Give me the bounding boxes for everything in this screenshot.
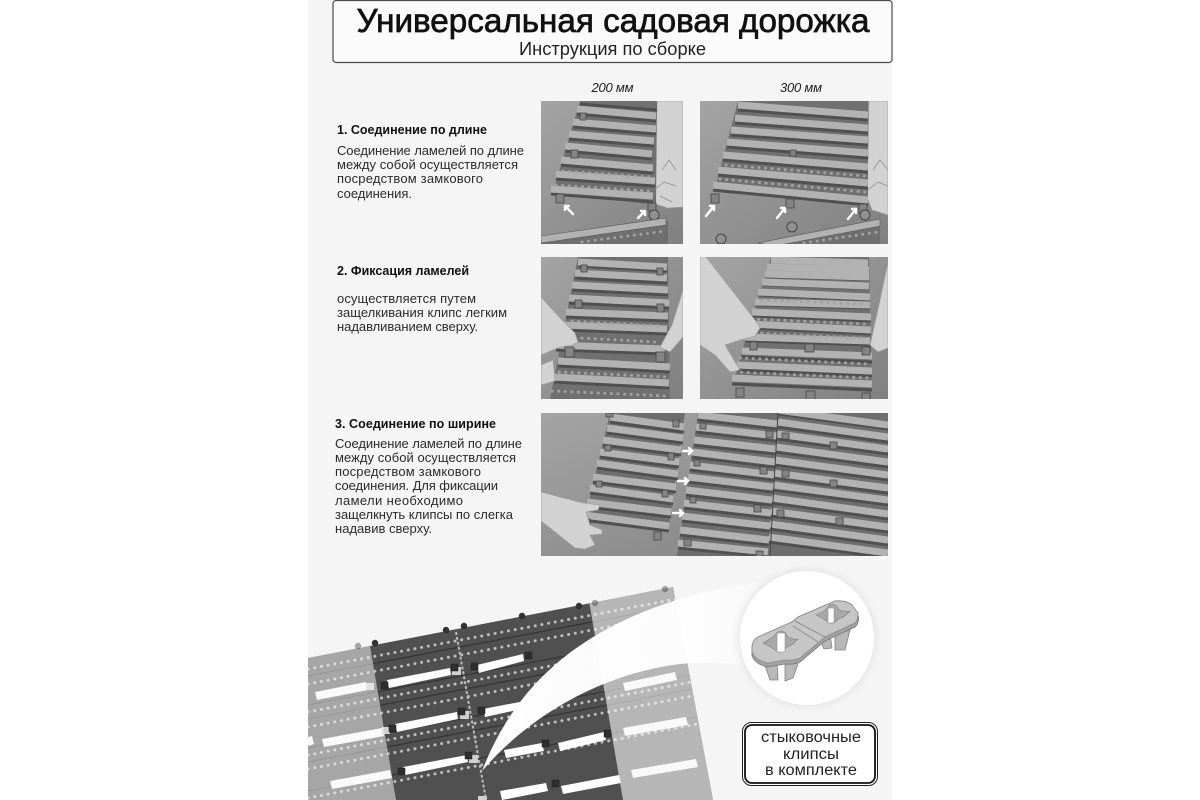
step 2 text: надавливанием сверху. (337, 319, 478, 334)
step 3 text: защелкнуть клипсы по слегка (335, 507, 514, 522)
step 3 text: 3. Соединение по ширине (335, 417, 496, 431)
column label: 300 mm: 300 мм (780, 80, 822, 95)
step 2 text: 2. Фиксация ламелей (337, 264, 469, 278)
background panel (308, 0, 892, 800)
callout: clips included: в комплекте (765, 762, 857, 779)
icon: docking clip (752, 601, 859, 681)
step 3 text: Соединение ламелей по длине (335, 436, 522, 451)
column label: 200 mm: 200 мм (590, 80, 634, 95)
image: step 1, 200 mm (541, 101, 683, 244)
step 1 text: между собой осуществляется (337, 157, 518, 172)
step 3 text: надавив сверху. (335, 521, 432, 536)
image: step 3, width connection (541, 410, 888, 558)
step 3 text: между собой осуществляется (335, 450, 516, 465)
step 3 text (335, 417, 522, 536)
callout: clips included: клипсы (783, 746, 839, 763)
title box (333, 0, 892, 62)
step 1 text: соединения. (337, 186, 412, 201)
step 1 text: Соединение ламелей по длине (337, 143, 524, 158)
magnifier circle with clip (738, 569, 876, 707)
bottom photo: assembled mat (308, 586, 713, 800)
step 1 text: посредством замкового (337, 171, 483, 186)
step 2 text (337, 264, 507, 334)
step 2 text: защелкивания клипс легким (337, 305, 507, 320)
step 3 text: соединения. Для фиксации (335, 478, 498, 493)
step 1 text: 1. Соединение по длине (337, 123, 487, 137)
step 1 text (337, 123, 524, 201)
step 3 text: ламели необходимо (335, 493, 463, 508)
title box: Инструкция по сборке (519, 39, 706, 59)
title box: Универсальная садовая дорожка (356, 2, 870, 39)
image: step 2, 200 mm (541, 257, 683, 399)
curved white sweep to magnified clip (482, 581, 761, 771)
callout: clips included (742, 722, 878, 786)
image: step 2, 300 mm (700, 257, 888, 402)
step 3 text: посредством замкового (335, 464, 481, 479)
image: step 1, 300 mm (700, 101, 888, 246)
step 2 text: осуществляется путем (337, 291, 476, 306)
callout: clips included: стыковочные (761, 729, 861, 746)
